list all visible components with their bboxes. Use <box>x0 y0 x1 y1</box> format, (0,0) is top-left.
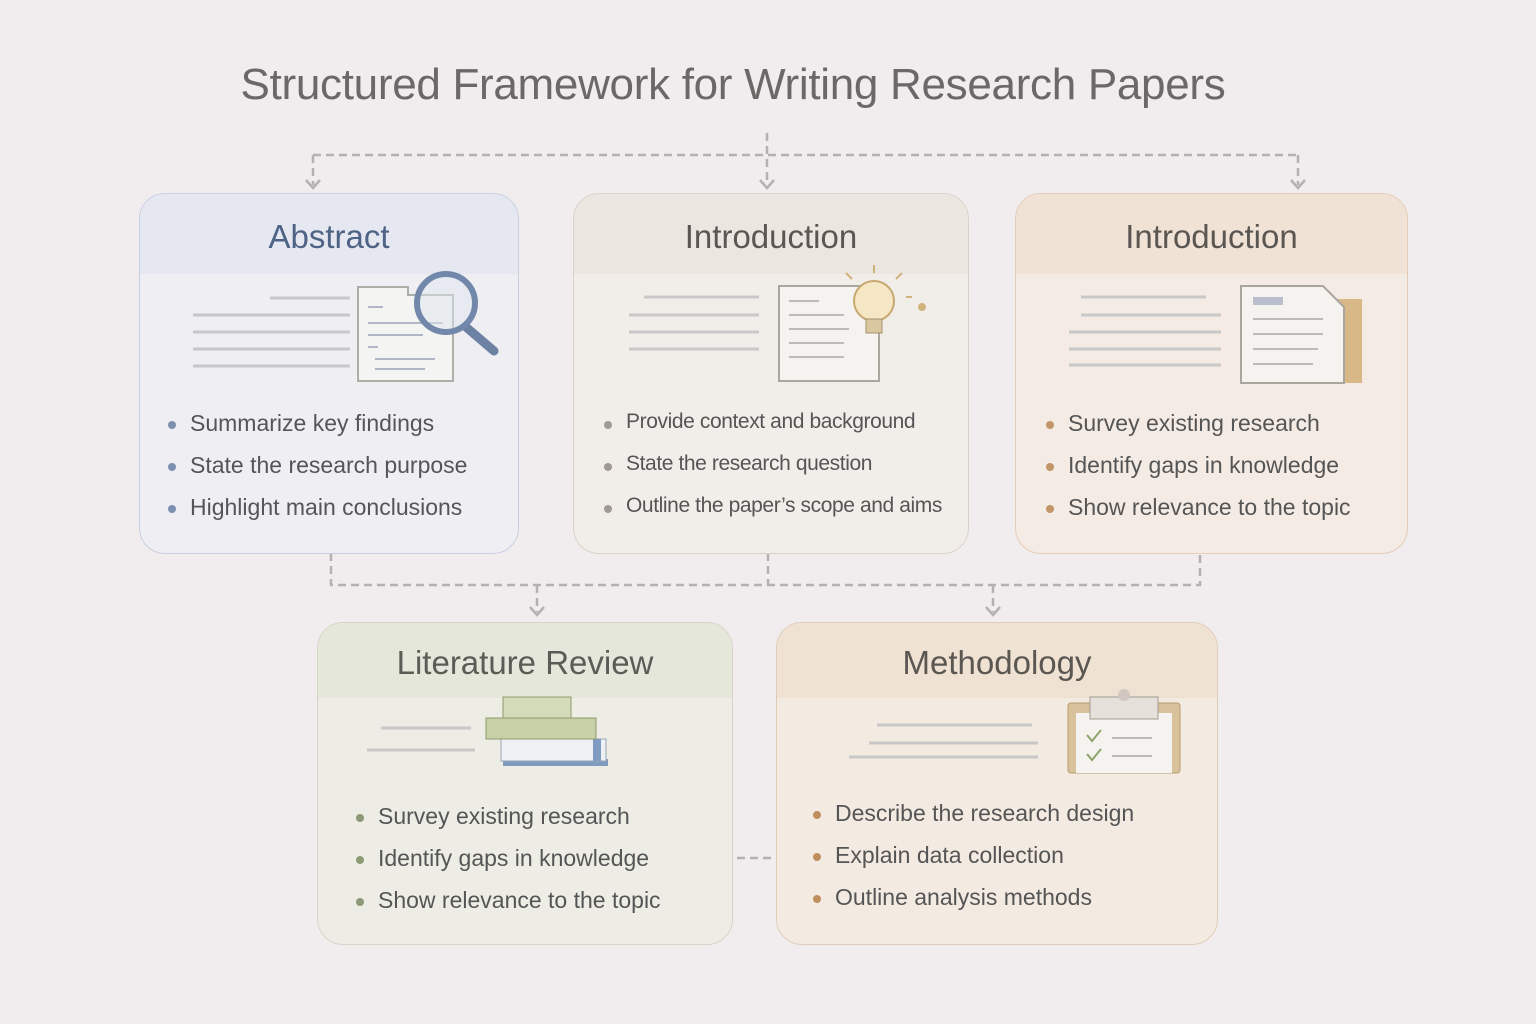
heading: introduction <box>574 194 968 274</box>
bullets: abstract: State the research purpose <box>190 452 467 478</box>
bullets: introduction 1: Outline the paper’s scope and aims <box>626 494 942 517</box>
heading: literature review: Literature Review <box>397 644 653 681</box>
icon: clipboard <box>849 689 1180 774</box>
bullets: abstract: Highlight main conclusions <box>190 494 462 520</box>
bullets: literature review: Identify gaps in knowledge <box>378 845 649 871</box>
bullets: methodology: Explain data collection <box>835 842 1064 868</box>
panel: introduction 2 <box>1015 193 1408 554</box>
bullets: literature review <box>356 803 661 913</box>
icon: books <box>367 696 608 766</box>
bullets: abstract <box>168 410 467 520</box>
bullets: methodology <box>813 800 1134 910</box>
bullets: introduction 1: State the research question <box>626 452 872 475</box>
panel: methodology <box>776 622 1218 945</box>
bullets: introduction 1: Provide context and background <box>626 410 915 433</box>
bullets: abstract: Summarize key findings <box>190 410 434 436</box>
panel: introduction 1 <box>573 193 969 554</box>
icon: document <box>1069 285 1362 384</box>
bullets: introduction 2 <box>1046 410 1351 520</box>
heading: introduction <box>1016 194 1407 274</box>
bullets: methodology: Outline analysis methods <box>835 884 1092 910</box>
panel: literature review <box>317 622 733 945</box>
heading: literature review <box>318 623 732 698</box>
bullets: introduction 2: Survey existing research <box>1068 410 1320 436</box>
title: Structured Framework for Writing Research Papers <box>241 60 1225 109</box>
bullets: introduction 2: Identify gaps in knowledge <box>1068 452 1339 478</box>
bullets: literature review: Survey existing research <box>378 803 630 829</box>
icon: document with lightbulb <box>629 265 926 382</box>
bullets: methodology: Describe the research design <box>835 800 1134 826</box>
icon: document with magnifier <box>193 271 498 382</box>
panel: abstract <box>139 193 519 554</box>
heading: abstract <box>140 194 518 274</box>
bullets: introduction 2: Show relevance to the topic <box>1068 494 1351 520</box>
bullets: literature review: Show relevance to the topic <box>378 887 661 913</box>
heading: introduction: Introduction <box>1125 218 1298 255</box>
heading: introduction: Introduction <box>685 218 857 255</box>
bullets: introduction 1 <box>604 410 942 517</box>
heading: methodology <box>777 623 1217 698</box>
heading: abstract: Abstract <box>268 218 390 255</box>
heading: methodology: Methodology <box>903 644 1091 681</box>
